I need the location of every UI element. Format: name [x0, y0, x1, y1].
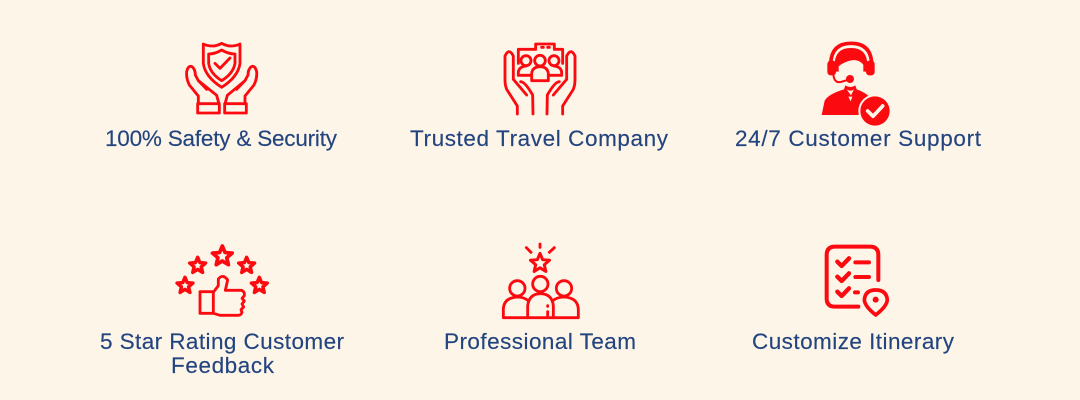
- label: star rating feedback second line: Feedback: [171, 353, 275, 378]
- label: safety and security: 100% Safety & Security: [105, 126, 338, 151]
- icon: five stars and thumbs up: [177, 246, 267, 315]
- label: customize itinerary: Customize Itinerary: [752, 329, 955, 354]
- icon: customer support agent: [822, 43, 892, 128]
- label: professional team: Professional Team: [444, 329, 636, 354]
- label: customer support: 24/7 Customer Support: [735, 126, 982, 151]
- icon: people and building in hands: [505, 44, 575, 114]
- label: trusted company: Trusted Travel Company: [410, 126, 669, 151]
- icon: checklist with location pin: [827, 247, 887, 315]
- icon: professional team with star: [503, 244, 578, 318]
- icon: shield in hands: [187, 43, 257, 113]
- label: star rating feedback: 5 Star Rating Customer: [100, 329, 344, 354]
